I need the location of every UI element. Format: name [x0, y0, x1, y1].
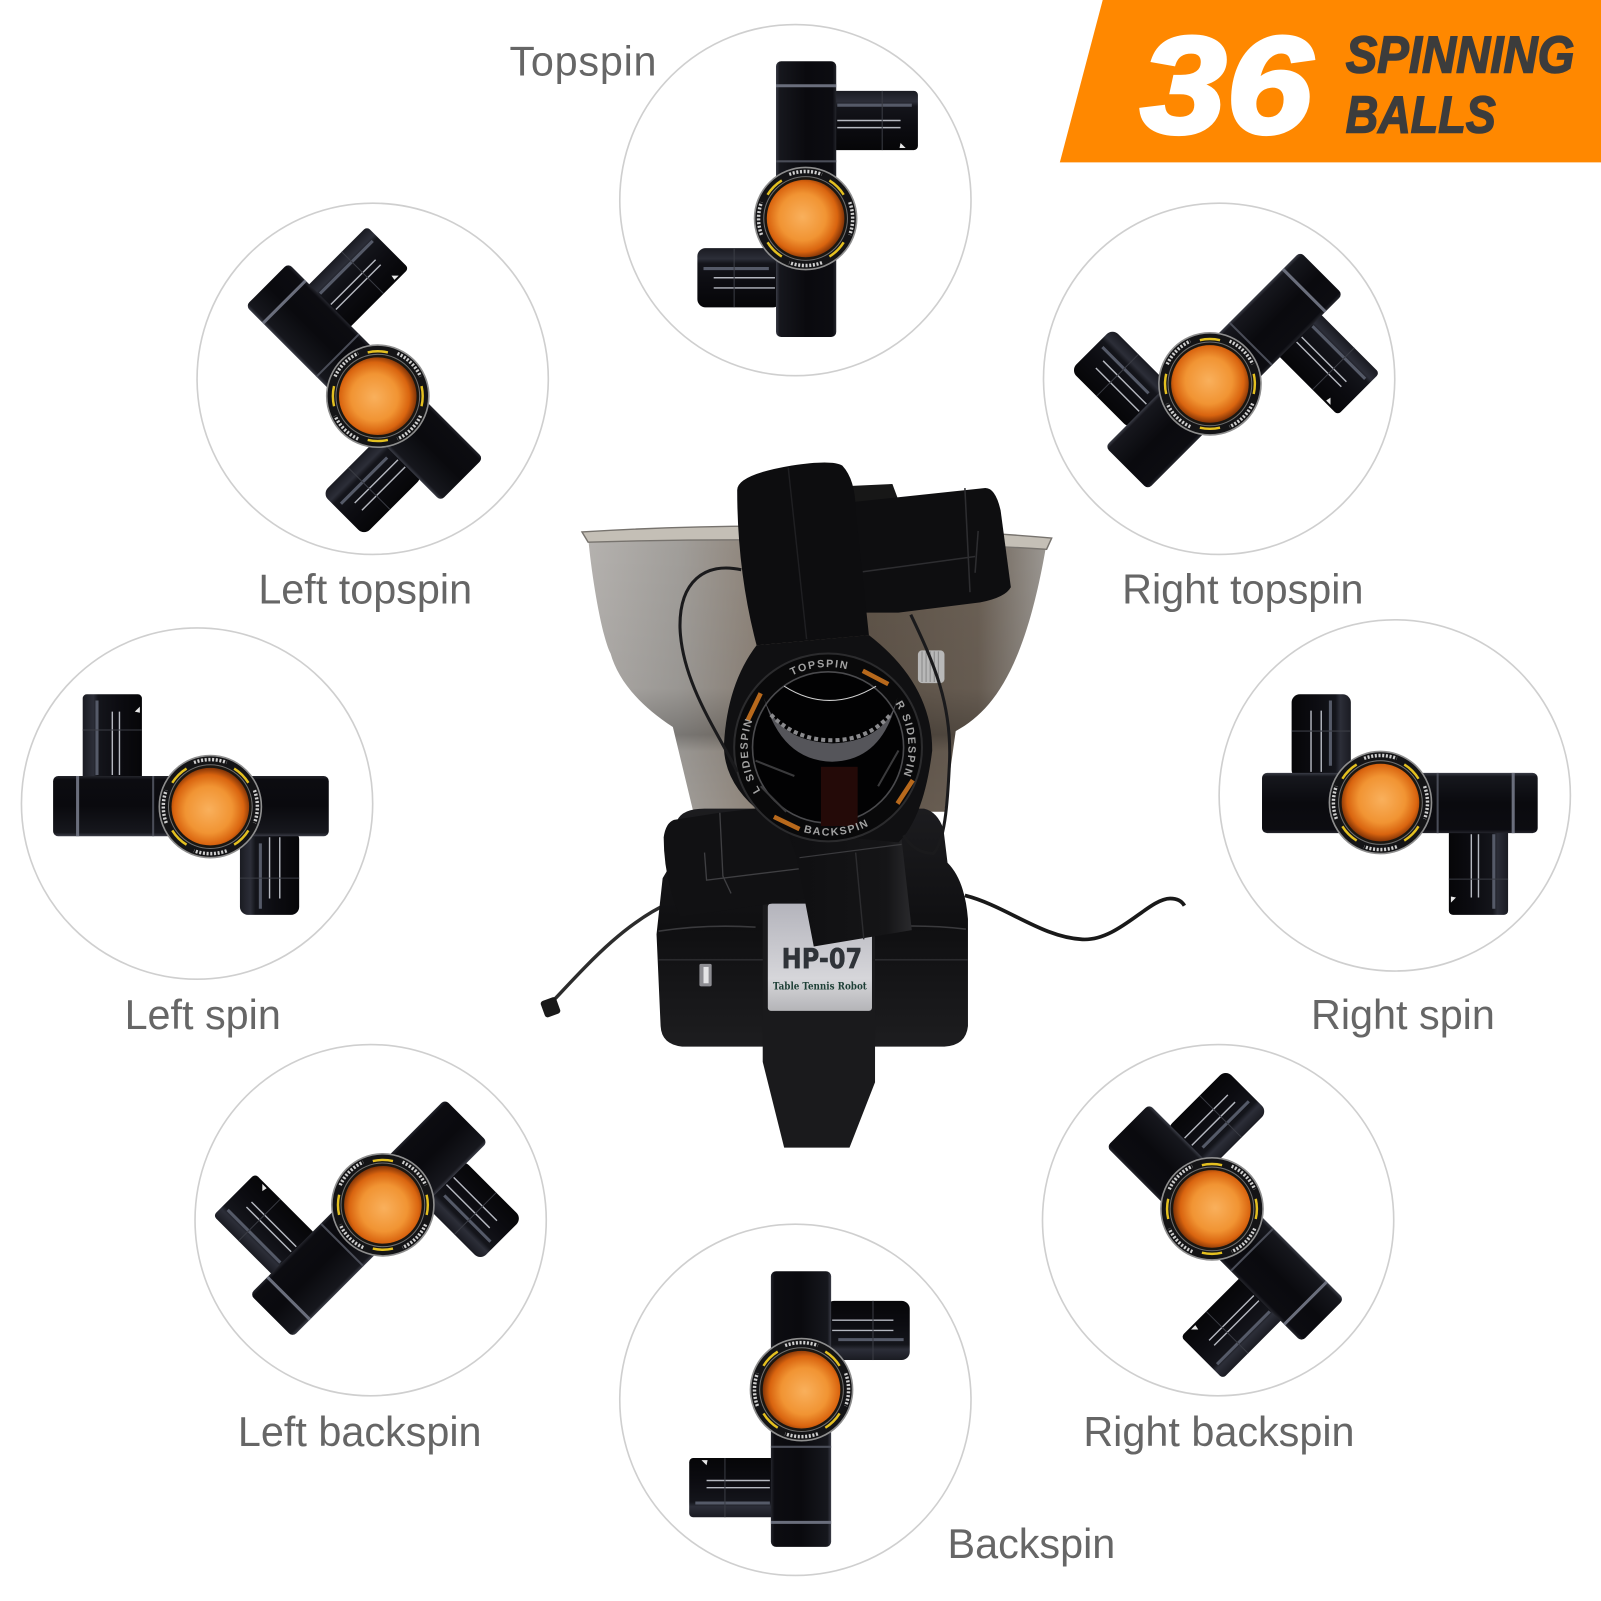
ring text: TOPSPIN: [789, 660, 848, 674]
upper motor cylinder: [850, 484, 1011, 613]
ring text: [740, 660, 916, 836]
upper arm: [737, 463, 869, 645]
label plate: [768, 904, 872, 1011]
USB port: [699, 964, 712, 986]
panel: backspin: [620, 1224, 971, 1575]
label: topspin: Topspin: [510, 39, 657, 85]
ring text: L SIDESPIN: [740, 719, 760, 794]
power cable right: [965, 895, 1184, 939]
robot: HP-07 table tennis robot: [540, 462, 1186, 1148]
panel: right topspin: [1044, 196, 1401, 554]
big number 36: 36: [1141, 9, 1314, 163]
model name: HP-07: [782, 943, 862, 975]
panel: right backspin: [1042, 1045, 1400, 1400]
adjustment knob: [918, 650, 944, 683]
lower motor cylinder: [664, 803, 807, 917]
lower arm: [786, 829, 912, 947]
ball hopper bowl: [582, 526, 1052, 812]
subtitle: Table Tennis Robot: [773, 980, 867, 992]
panel: left backspin: [192, 1042, 546, 1396]
panel: left spin: [21, 628, 373, 979]
label: left spin: Left spin: [125, 992, 281, 1038]
banner text line 2: BALLS: [1346, 87, 1496, 145]
spin selection ring: [724, 635, 932, 842]
label: right topspin: Right topspin: [1122, 566, 1363, 612]
ring text: R SIDESPIN: [896, 700, 916, 777]
label: left backspin: Left backspin: [238, 1409, 482, 1455]
label: right backspin: Right backspin: [1083, 1409, 1355, 1455]
label: left topspin: Left topspin: [258, 566, 472, 612]
panel: left topspin: [190, 203, 548, 556]
panel: right spin: [1219, 620, 1570, 971]
inner view with ball comb: [756, 686, 899, 826]
banner: 36 spinning balls: [1060, 0, 1601, 163]
label: right spin: Right spin: [1311, 992, 1495, 1038]
cable left and plug: [540, 903, 670, 1018]
base unit: [657, 809, 968, 1047]
panel: topspin: [620, 25, 971, 376]
orange ring marks: [747, 671, 913, 829]
ring text: BACKSPIN: [804, 820, 868, 836]
banner text line 1: SPINNING: [1346, 26, 1574, 84]
front leg: [763, 904, 875, 1148]
looped wires: [680, 568, 950, 854]
label: backspin: Backspin: [948, 1521, 1115, 1567]
